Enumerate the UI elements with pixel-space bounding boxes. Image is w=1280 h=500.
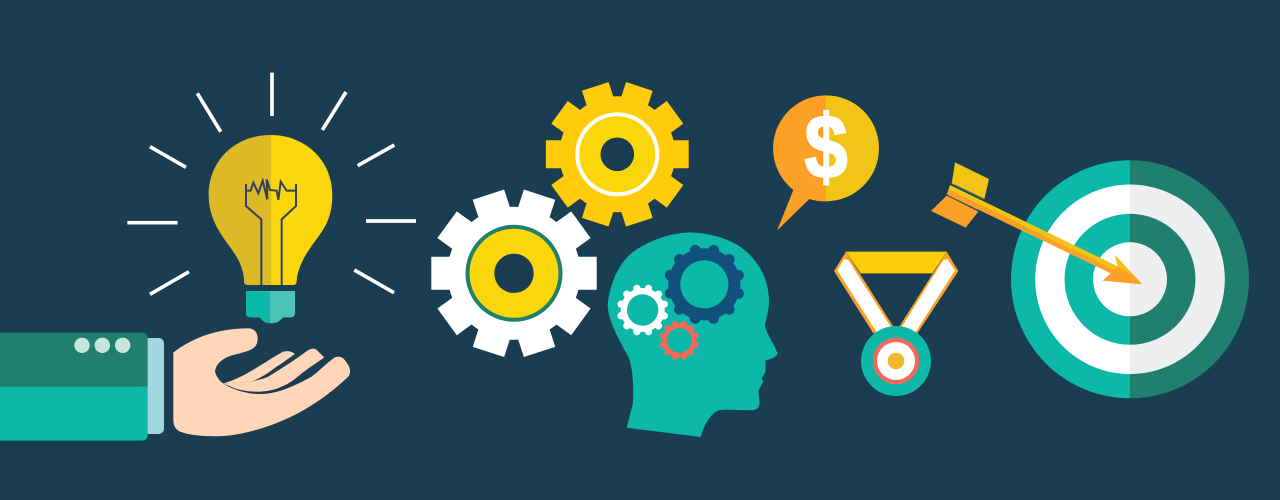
sleeve buttons xyxy=(74,338,130,353)
icon: white gear xyxy=(431,188,597,358)
icon: dollar speech bubble xyxy=(773,95,879,231)
gear teeth xyxy=(431,188,597,358)
right ribbon xyxy=(899,252,958,333)
icon: medal xyxy=(834,252,958,396)
sleeve xyxy=(0,333,148,441)
navy gear xyxy=(661,241,748,328)
open hand xyxy=(173,328,350,436)
gear teeth xyxy=(546,81,689,227)
icon: light bulb with rays xyxy=(127,73,416,323)
left ribbon xyxy=(834,252,893,333)
bulb screw base xyxy=(246,291,295,323)
bubble xyxy=(773,95,879,231)
gear hub xyxy=(575,112,659,196)
icon: arrow xyxy=(931,162,1142,284)
medal disc xyxy=(861,326,931,396)
fletching xyxy=(931,162,989,228)
light rays xyxy=(127,73,416,294)
shirt cuff xyxy=(140,338,164,434)
red gear xyxy=(659,320,700,361)
icon: yellow gear xyxy=(546,81,689,227)
target right half xyxy=(1130,160,1249,398)
white gear xyxy=(615,283,670,337)
ribbons xyxy=(834,252,958,333)
bulb glass xyxy=(209,135,332,285)
icon: arm and open hand xyxy=(0,328,350,441)
head silhouette xyxy=(608,232,777,437)
arrowhead xyxy=(1103,255,1142,284)
icon: target xyxy=(1011,160,1249,398)
shaft xyxy=(947,185,1118,275)
icon: head with gears xyxy=(608,232,777,437)
filament xyxy=(246,179,296,285)
dollar sign: $ xyxy=(804,97,848,197)
gear hub xyxy=(466,225,562,322)
yellow ribbon band xyxy=(846,252,947,273)
target left half xyxy=(1011,160,1130,398)
